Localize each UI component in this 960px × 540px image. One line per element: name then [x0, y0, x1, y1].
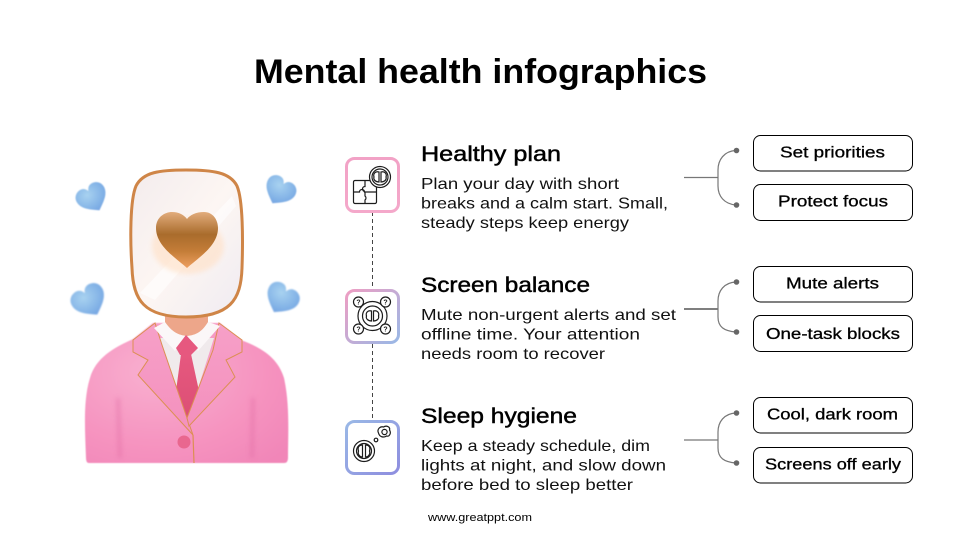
icon tile: brain and thought bubble — [346, 422, 398, 474]
question marks: ? — [383, 326, 388, 334]
block: Screen balance — [421, 274, 677, 363]
tie blade — [176, 354, 199, 418]
pill: Set priorities — [754, 136, 912, 171]
question marks: ? — [356, 300, 361, 306]
sleeve creases — [118, 398, 253, 458]
question marks — [356, 300, 388, 334]
left lapel — [133, 323, 193, 435]
block: Sleep hygiene — [421, 405, 666, 494]
icon: blue heart top left — [72, 179, 113, 218]
connector 1 — [684, 148, 739, 208]
pill: Set priorities: Set priorities — [780, 144, 885, 162]
shirt collar — [154, 322, 220, 351]
block: Screen balance: needs room to recover — [421, 346, 606, 363]
button — [178, 436, 190, 448]
icon tile: puzzle and brain — [346, 158, 398, 212]
pill: Cool, dark room: Cool, dark room — [767, 406, 898, 424]
block: Sleep hygiene: Sleep hygiene — [421, 405, 577, 428]
neck — [165, 316, 208, 339]
pill: One-task blocks — [754, 316, 912, 352]
block: Healthy plan: Healthy plan — [421, 143, 561, 166]
mirror glare — [140, 196, 236, 300]
icon tile: brain with questions — [346, 290, 398, 342]
block: Sleep hygiene: Keep a steady schedule, dim — [421, 438, 650, 455]
heart glow — [152, 218, 224, 274]
mirror — [131, 170, 242, 317]
block: Healthy plan: steady steps keep energy — [421, 215, 629, 232]
icon: blue heart top right — [259, 172, 300, 211]
pill: Protect focus — [754, 184, 912, 220]
right lapel — [187, 323, 242, 426]
block: Screen balance: Screen balance — [421, 274, 590, 297]
block: Healthy plan — [421, 143, 668, 232]
shirt — [160, 338, 214, 420]
connector 2 — [684, 279, 739, 335]
block: Healthy plan: breaks and a calm start. Small, — [421, 196, 668, 212]
icon: gold heart — [156, 212, 218, 268]
icon: blue heart bottom right — [259, 278, 303, 321]
question marks: ? — [383, 300, 388, 306]
pill: Cool, dark room — [754, 398, 912, 433]
footer url: www.greatppt.com — [427, 512, 532, 524]
title: Mental health infographics — [254, 53, 707, 91]
jacket front seam — [193, 435, 194, 463]
pill: Screens off early — [754, 448, 912, 483]
pill: Mute alerts — [754, 266, 912, 302]
block: Healthy plan: Plan your day with short — [421, 176, 620, 193]
block: Screen balance: Mute non-urgent alerts and set — [421, 307, 677, 324]
illustration: person with mirror head — [67, 170, 303, 463]
pill: One-task blocks: One-task blocks — [766, 326, 900, 343]
icon: blue heart bottom left — [67, 279, 112, 323]
pill: Screens off early: Screens off early — [765, 456, 901, 474]
timeline dashed line — [372, 212, 374, 421]
block: Screen balance: offline time. Your attention — [421, 326, 640, 344]
connector 3 — [684, 410, 739, 466]
pill: Mute alerts: Mute alerts — [786, 276, 879, 292]
tie knot — [176, 335, 198, 355]
pill: Protect focus: Protect focus — [778, 194, 888, 210]
suit jacket — [85, 323, 288, 463]
block: Sleep hygiene: lights at night, and slow down — [421, 458, 666, 474]
question marks: ? — [356, 326, 361, 334]
block: Sleep hygiene: before bed to sleep better — [421, 477, 634, 494]
